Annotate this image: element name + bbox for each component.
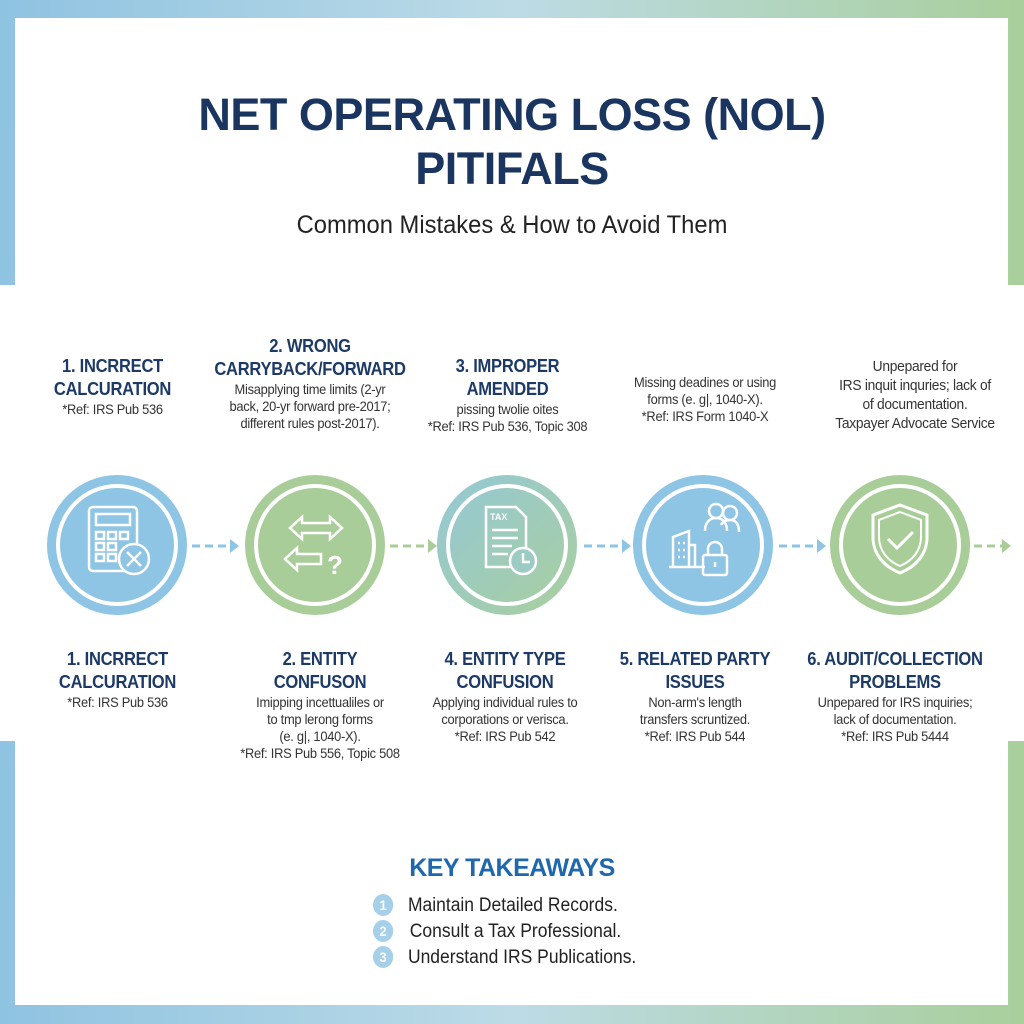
bottom text: col5: Unpepared for IRS inquiries; bbox=[818, 694, 972, 710]
bottom text: col2: CONFUSON bbox=[274, 672, 366, 692]
bottom text: col4: transfers scruntized. bbox=[640, 711, 750, 727]
takeaways list: Consult a Tax Professional. bbox=[410, 921, 621, 942]
subtitle: Common Mistakes & How to Avoid Them bbox=[297, 211, 727, 239]
bottom text: col3: 4. ENTITY TYPE bbox=[444, 649, 565, 669]
top text: col2: different rules post-2017). bbox=[240, 415, 380, 431]
arrow 1 bbox=[192, 539, 239, 553]
takeaways list: 3 bbox=[380, 949, 387, 965]
bottom text: col1: CALCURATION bbox=[59, 672, 176, 692]
icon: building people lock bbox=[633, 475, 773, 615]
top text: col3 bbox=[428, 356, 587, 434]
bottom text: col5 bbox=[807, 649, 983, 744]
top text: col3: 3. IMPROPER bbox=[456, 356, 559, 376]
bottom text: col5: 6. AUDIT/COLLECTION bbox=[807, 649, 983, 669]
arrow 4 bbox=[779, 539, 826, 553]
bottom text: col3: *Ref: IRS Pub 542 bbox=[455, 728, 555, 744]
takeaways list: Maintain Detailed Records. bbox=[408, 895, 618, 916]
top text: col4 bbox=[634, 374, 776, 424]
icon: calculator bbox=[47, 475, 187, 615]
top panel bbox=[15, 18, 1008, 288]
top text: col2 bbox=[214, 336, 406, 431]
icon: tax form clock: TAX bbox=[490, 512, 507, 522]
icon: tax form clock bbox=[437, 475, 577, 615]
bottom text: col4: *Ref: IRS Pub 544 bbox=[645, 728, 745, 744]
bottom text: col5: PROBLEMS bbox=[849, 672, 941, 692]
top text: col4: Missing deadines or using bbox=[634, 374, 776, 390]
top text: col5 bbox=[835, 358, 995, 432]
bottom text: col2: Imipping incettualiles or bbox=[256, 694, 384, 710]
bottom text: col2: (e. g|, 1040-X). bbox=[279, 728, 361, 744]
top text: col1: CALCURATION bbox=[54, 379, 171, 399]
bottom text: col2: 2. ENTITY bbox=[283, 649, 357, 669]
top text: col4: forms (e. g|, 1040-X). bbox=[647, 391, 763, 407]
bottom text: col3 bbox=[432, 649, 578, 744]
title bbox=[198, 89, 826, 194]
top text: col5: of documentation. bbox=[862, 396, 968, 413]
bottom text: col3: corporations or verisca. bbox=[441, 711, 569, 727]
top text: col2: 2. WRONG bbox=[269, 336, 351, 356]
top text: col5: IRS inquit inquries; lack of bbox=[839, 377, 991, 394]
takeaways list: Understand IRS Publications. bbox=[408, 947, 636, 968]
bottom text: col4: 5. RELATED PARTY bbox=[620, 649, 770, 669]
top text: col5: Unpepared for bbox=[873, 358, 957, 375]
title: PITIFALS bbox=[415, 143, 609, 194]
top text: col3: *Ref: IRS Pub 536, Topic 308 bbox=[428, 418, 587, 434]
middle band bbox=[0, 285, 1024, 741]
top text: col2: CARRYBACK/FORWARD bbox=[214, 359, 406, 379]
bottom text: col2: to tmp lerong forms bbox=[267, 711, 373, 727]
top text: col3: pissing twolie oites bbox=[457, 401, 558, 417]
arrow 3 bbox=[584, 539, 631, 553]
top text: col1: 1. INCRRECT bbox=[62, 356, 163, 376]
bottom text: col4: Non-arm's length bbox=[648, 694, 742, 710]
bottom text: col4: ISSUES bbox=[665, 672, 725, 692]
bottom text: col1 bbox=[59, 649, 176, 710]
bottom text: col1: *Ref: IRS Pub 536 bbox=[67, 694, 168, 710]
bottom text: col2 bbox=[240, 649, 400, 761]
top text: col4: *Ref: IRS Form 1040-X bbox=[642, 408, 768, 424]
top text: col5: Taxpayer Advocate Service bbox=[835, 415, 995, 432]
top text: col2: Misapplying time limits (2-yr bbox=[235, 381, 385, 397]
icon: shield check bbox=[830, 475, 970, 615]
icon: arrows question bbox=[245, 475, 385, 615]
top text: col3: AMENDED bbox=[467, 379, 548, 399]
bottom text: col5: *Ref: IRS Pub 5444 bbox=[841, 728, 949, 744]
takeaways list bbox=[373, 894, 636, 968]
top text: col2: back, 20-yr forward pre-2017; bbox=[230, 398, 390, 414]
takeaways list: 2 bbox=[380, 923, 387, 939]
icon: arrows question: ? bbox=[327, 550, 343, 580]
top text: col1 bbox=[54, 356, 171, 417]
takeaways list: 1 bbox=[380, 897, 387, 913]
bottom text: col4 bbox=[620, 649, 770, 744]
bottom text: col3: Applying individual rules to bbox=[433, 694, 577, 710]
bottom text: col3: CONFUSION bbox=[457, 672, 553, 692]
bottom text: col5: lack of documentation. bbox=[834, 711, 956, 727]
bottom panel bbox=[15, 740, 1008, 1005]
arrow 5 bbox=[974, 539, 1011, 553]
key takeaways heading: KEY TAKEAWAYS bbox=[409, 854, 615, 882]
bottom text: col2: *Ref: IRS Pub 556, Topic 508 bbox=[240, 745, 400, 761]
arrow 2 bbox=[390, 539, 437, 553]
top text: col1: *Ref: IRS Pub 536 bbox=[62, 401, 163, 417]
bottom text: col1: 1. INCRRECT bbox=[67, 649, 168, 669]
title: NET OPERATING LOSS (NOL) bbox=[198, 89, 826, 140]
